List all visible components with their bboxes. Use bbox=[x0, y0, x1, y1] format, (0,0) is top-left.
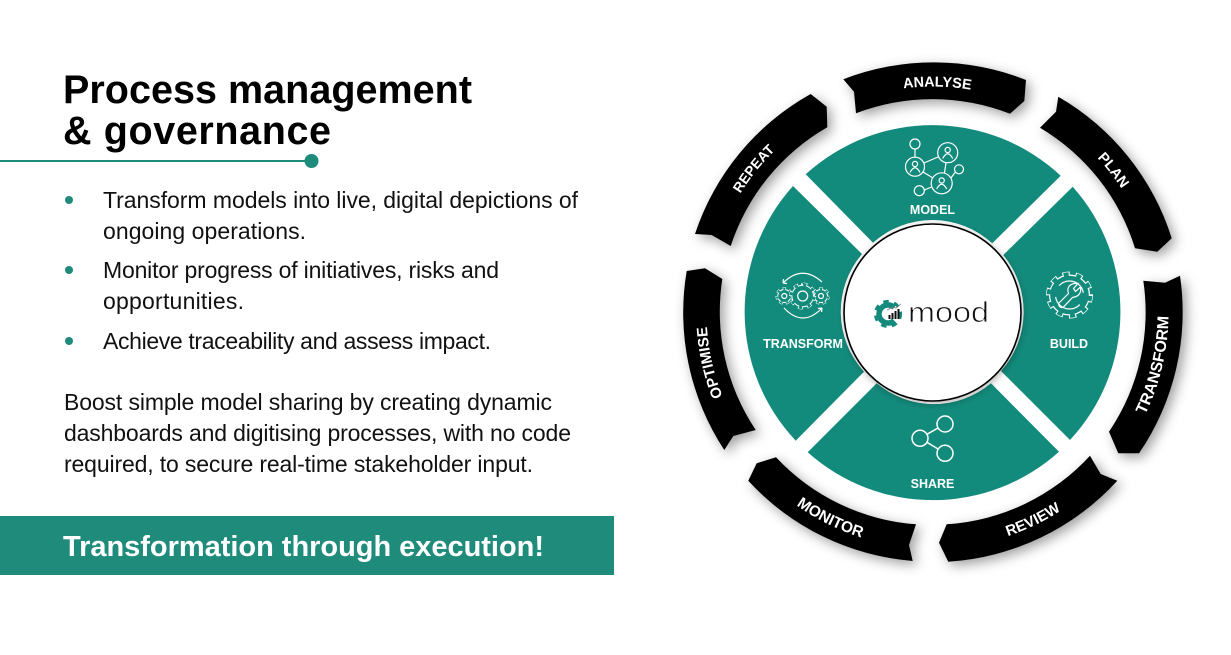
ring labels: TRANSFORM bbox=[1135, 316, 1169, 412]
icon: transform gears bbox=[777, 273, 829, 318]
ring labels bbox=[696, 76, 1169, 538]
icon: share bbox=[912, 416, 953, 461]
hub circle bbox=[844, 224, 1021, 401]
paragraph: dashboards and digitising processes, with no code bbox=[64, 420, 571, 446]
label: build: BUILD bbox=[1050, 337, 1088, 351]
banner bbox=[0, 516, 614, 575]
bullet list bbox=[65, 187, 579, 354]
outer ring segments bbox=[683, 62, 1183, 562]
title: & governance bbox=[63, 109, 331, 153]
sector: model bbox=[806, 125, 1061, 243]
bullet list: Monitor progress of initiatives, risks and bbox=[103, 257, 499, 283]
paragraph: required, to secure real-time stakeholder input. bbox=[64, 451, 533, 477]
ring labels: MONITOR bbox=[797, 497, 864, 538]
sector: transform bbox=[745, 186, 864, 441]
icon: model network bbox=[906, 139, 964, 196]
bullet list: opportunities. bbox=[103, 288, 244, 314]
logo: mood bbox=[875, 297, 989, 329]
title: Process management bbox=[63, 68, 472, 112]
bullet list: ongoing operations. bbox=[103, 218, 306, 244]
ring labels: ANALYSE bbox=[904, 76, 972, 90]
ring labels: REPEAT bbox=[732, 144, 773, 193]
paragraph bbox=[64, 389, 571, 477]
label: transform: TRANSFORM bbox=[763, 337, 843, 351]
banner: Transformation through execution! bbox=[63, 531, 544, 563]
title bbox=[63, 68, 472, 153]
label: share: SHARE bbox=[911, 477, 954, 491]
bullet list: Achieve traceability and assess impact. bbox=[103, 328, 491, 354]
bullet list: Transform models into live, digital depictions of bbox=[103, 187, 579, 213]
title underline with dot bbox=[0, 154, 318, 168]
process wheel bbox=[680, 58, 1194, 572]
sector: share bbox=[808, 383, 1059, 500]
ring labels: OPTIMISE bbox=[696, 327, 722, 398]
ring labels: REVIEW bbox=[1005, 502, 1059, 536]
paragraph: Boost simple model sharing by creating dynamic bbox=[64, 389, 552, 415]
logo: mood: mood bbox=[908, 297, 989, 329]
sector: build bbox=[1001, 187, 1120, 440]
label: model: MODEL bbox=[910, 203, 955, 217]
icon: build gear with wrench bbox=[1048, 274, 1091, 316]
ring labels: PLAN bbox=[1098, 152, 1130, 188]
